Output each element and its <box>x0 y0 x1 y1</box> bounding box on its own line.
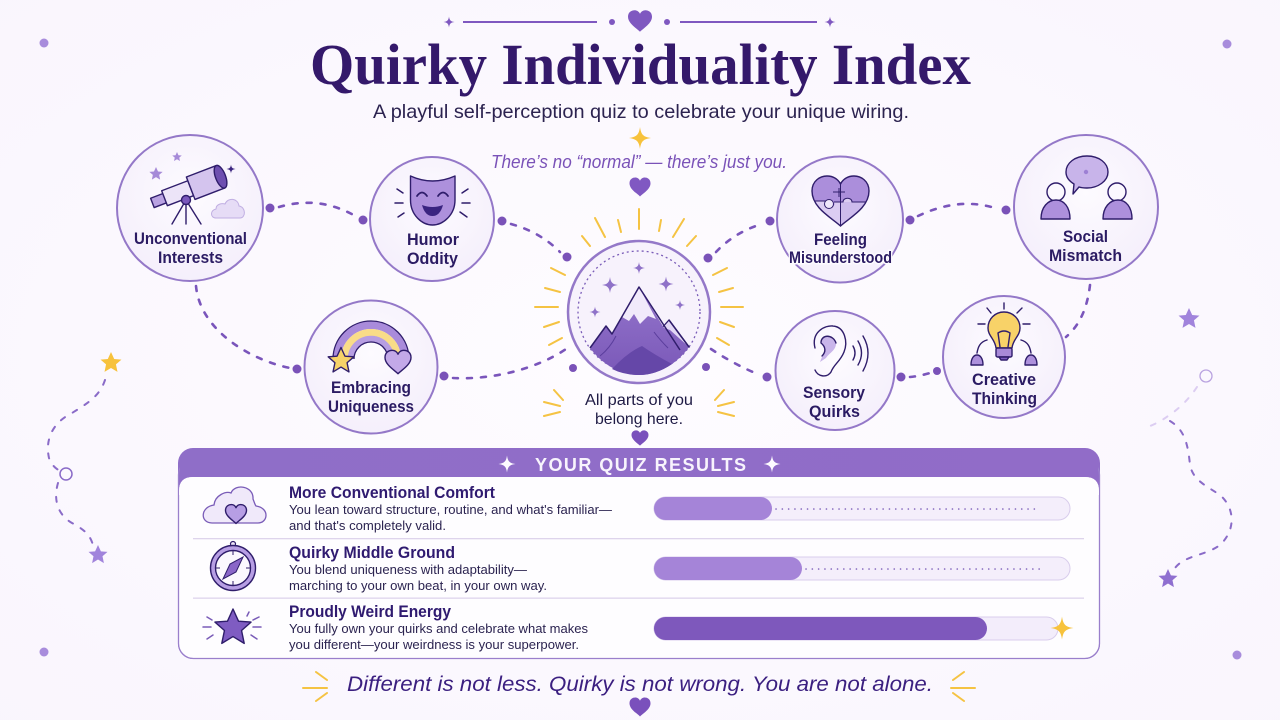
icon: cloud with heart <box>203 487 266 523</box>
panel: Humor Oddity <box>370 157 494 281</box>
top ornament <box>444 10 836 32</box>
icon: heart under tagline <box>630 178 650 196</box>
result row: Quirky Middle Ground: marching to your own beat, in your own way. <box>289 578 547 593</box>
panel: Sensory Quirks <box>776 311 894 430</box>
tagline: There’s no “normal” — there’s just you. <box>491 152 787 172</box>
subtitle: A playful self-perception quiz to celebrate your unique wiring. <box>373 101 909 123</box>
label: Quirks <box>809 402 860 421</box>
icon: sparkles <box>590 262 685 318</box>
result row: Quirky Middle Ground: You blend uniqueness with adaptability— <box>289 562 527 577</box>
right star trail <box>1150 308 1232 587</box>
label: Social <box>1063 227 1108 246</box>
icon: two people and speech bubble <box>1041 156 1132 219</box>
results heading: YOUR QUIZ RESULTS <box>535 455 746 475</box>
label: Oddity <box>407 249 459 268</box>
label: Mismatch <box>1049 246 1122 265</box>
label: Creative <box>972 370 1036 389</box>
panel: Feeling Misunderstood <box>777 156 903 282</box>
icon: rainbow with star and heart <box>328 321 411 374</box>
result row: More Conventional Comfort: You lean toward structure, routine, and what's familiar— <box>289 502 612 517</box>
result row: Quirky Middle Ground: Quirky Middle Ground <box>289 544 455 562</box>
footer message: Different is not less. Quirky is not wrong. You are not alone. <box>347 672 933 696</box>
icon: compass <box>210 542 256 590</box>
result row: Proudly Weird Energy: You fully own your quirks and celebrate what makes <box>289 621 588 636</box>
icon: telescope <box>148 152 244 224</box>
result row: More Conventional Comfort: and that's completely valid. <box>289 518 446 533</box>
rays around centre <box>535 209 743 416</box>
footer message <box>303 672 975 701</box>
icon: bottom heart <box>630 698 650 716</box>
panel: Creative Thinking <box>943 296 1065 418</box>
label: Thinking <box>972 389 1037 408</box>
result row: More Conventional Comfort <box>203 484 1070 533</box>
label: Uniqueness <box>328 397 414 416</box>
icon: puzzle heart <box>810 174 872 228</box>
panel: Unconventional Interests <box>117 135 263 281</box>
label: Unconventional <box>134 229 247 248</box>
title: Quirky Individuality Index <box>310 32 971 97</box>
label: Sensory <box>803 383 865 402</box>
icon: star with rays <box>203 609 261 643</box>
bar: 36 percent <box>654 557 1070 580</box>
result row: Proudly Weird Energy: you different—your weirdness is your superpower. <box>289 637 579 652</box>
result row: Proudly Weird Energy <box>203 603 1074 652</box>
left star trail <box>48 352 121 563</box>
label: Interests <box>158 248 223 267</box>
panel: centre mountain <box>568 241 710 383</box>
panel: Embracing Uniqueness <box>304 300 438 434</box>
icon: heart under caption <box>632 430 648 446</box>
label <box>1049 227 1122 265</box>
label <box>803 383 865 421</box>
panel: Social Mismatch <box>1014 135 1158 279</box>
icon: smiling mask <box>395 176 470 225</box>
icon: lightbulb <box>971 303 1037 365</box>
label <box>134 229 247 267</box>
label <box>328 378 414 416</box>
result row: Quirky Middle Ground <box>210 542 1070 593</box>
centre caption: belong here. <box>595 411 683 428</box>
label <box>972 370 1037 408</box>
centre caption: All parts of you <box>585 392 693 409</box>
icon: mountain <box>590 287 689 375</box>
label: Humor <box>407 230 459 249</box>
label <box>407 230 459 268</box>
icon: ear with sound waves <box>814 326 868 376</box>
label <box>789 230 892 267</box>
label: Embracing <box>331 378 411 397</box>
label: Feeling <box>814 230 867 249</box>
centre caption <box>585 392 693 428</box>
result row: Proudly Weird Energy: Proudly Weird Energy <box>289 603 452 621</box>
label: Misunderstood <box>789 248 892 267</box>
icon: gold sparkle <box>629 127 651 149</box>
bar: 28 percent <box>654 497 1070 520</box>
result row: More Conventional Comfort: More Conventional Comfort <box>289 484 495 502</box>
panel: quiz results <box>178 448 1100 659</box>
connectors <box>196 203 1090 382</box>
bar: 80 percent <box>654 616 1074 640</box>
